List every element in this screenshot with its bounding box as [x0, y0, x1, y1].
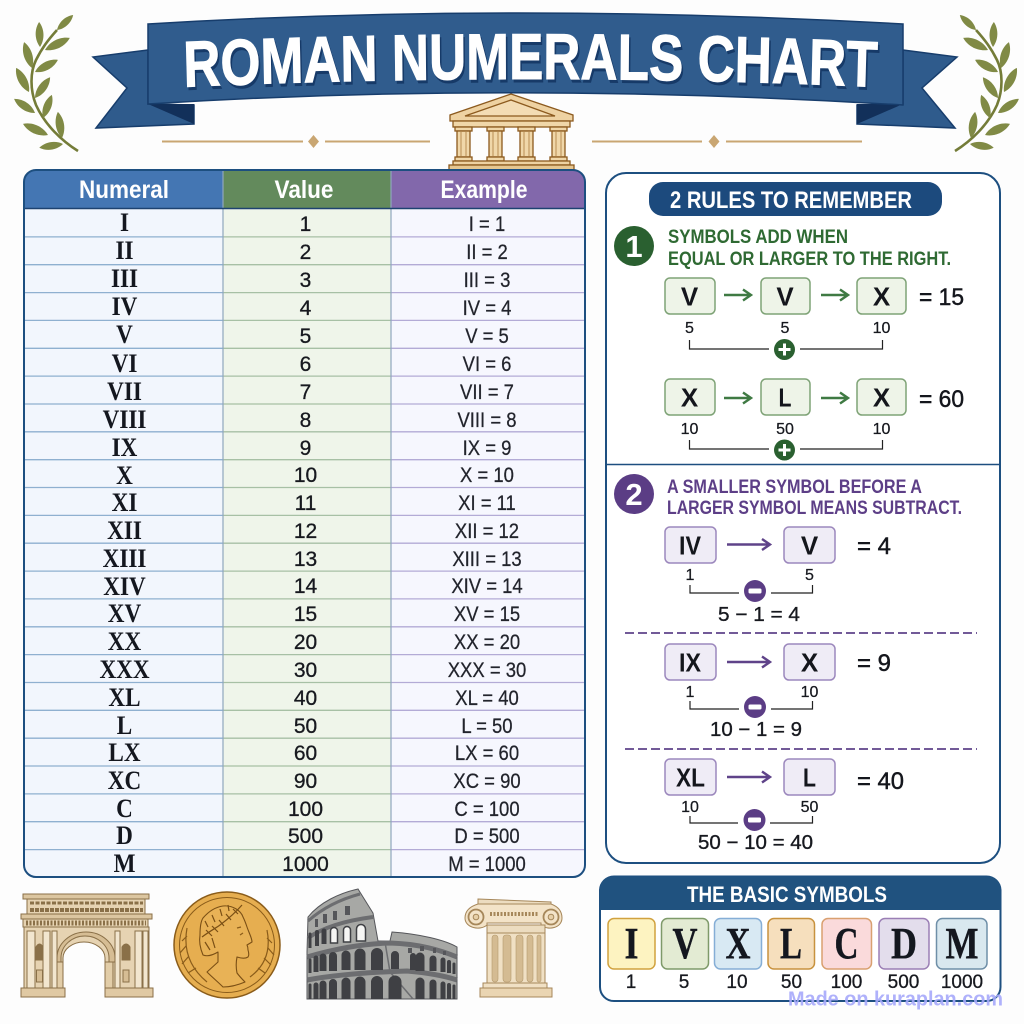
rules heading pill: 2 RULES TO REMEMBER: [670, 187, 912, 214]
table header: Numeral: [79, 176, 169, 204]
rule 2 example: IX: = 9: [857, 650, 891, 677]
rule 1 example: V V X = 15: [665, 278, 964, 360]
value column: 12: [294, 520, 317, 543]
value column: 60: [294, 742, 317, 765]
coin laurel wreath detail: [202, 905, 242, 950]
rule 2 example: IV: V: [801, 530, 819, 560]
rule 2 example: IV: 5 − 1 = 4: [718, 604, 800, 626]
example column: IX = 9: [463, 437, 511, 460]
numeral column: VII: [107, 378, 142, 406]
table header: [24, 170, 585, 208]
value column: 2: [300, 241, 311, 264]
numeral column: L: [117, 712, 132, 740]
example column: VII = 7: [460, 381, 514, 404]
rule 1 heading: [614, 226, 951, 270]
numeral column: XIII: [103, 545, 146, 573]
numeral column: XII: [107, 517, 142, 545]
rule 2 example: IX: 10 − 1 = 9: [710, 719, 802, 741]
numeral column: V: [116, 321, 133, 349]
table grid lines: [24, 170, 585, 877]
numeral column: LX: [108, 739, 141, 767]
rule 1 example: X L X = 60: = 60: [919, 386, 964, 413]
table header: Example: [440, 176, 528, 204]
symbol letters: V: [672, 919, 698, 968]
numeral column: C: [116, 795, 133, 823]
panel: rules: [606, 173, 1000, 863]
rule 2 example: XL: = 40: [857, 768, 904, 795]
example column: VI = 6: [463, 353, 511, 376]
rule 2 example: IV: 5: [805, 567, 814, 584]
rules panel frame: [606, 173, 1000, 863]
numeral column: XXX: [99, 656, 150, 684]
rule 1 example: V V X = 15: V: [681, 282, 699, 312]
table column backgrounds: [24, 208, 585, 877]
numeral column: IV: [112, 293, 138, 321]
numeral column: I: [120, 209, 129, 237]
value column: 13: [294, 548, 317, 571]
rule 2 example: XL: L: [803, 762, 816, 792]
rule 2 example: IX: X: [801, 648, 819, 678]
numeral column: VI: [112, 350, 137, 378]
example column: L = 50: [461, 715, 513, 738]
rule 1 heading: 1: [625, 229, 643, 264]
value column: 1: [300, 213, 311, 236]
numeral column: IX: [112, 434, 138, 462]
rule 2 heading: [614, 474, 962, 519]
example column: D = 500: [454, 825, 520, 848]
banner main ribbon: [148, 13, 903, 105]
example column: XIV = 14: [451, 575, 523, 598]
symbol letters: C: [834, 919, 858, 968]
rule 2 example: IX: [665, 644, 891, 741]
numeral column: XL: [108, 684, 141, 712]
table header: Value: [274, 176, 334, 204]
value column: 15: [294, 603, 317, 626]
value column: 30: [294, 659, 317, 682]
example column: M = 1000: [448, 853, 526, 876]
numeral column: D: [116, 822, 133, 850]
symbol values: 100: [831, 972, 862, 993]
numeral column: XV: [108, 600, 141, 628]
rule 1 example: V V X = 15: = 15: [919, 284, 964, 311]
symbol values: 500: [888, 972, 919, 993]
dashed separator: [625, 748, 977, 750]
rule 2 heading: 2: [625, 477, 643, 512]
rule 2 example: IV: = 4: [857, 533, 891, 560]
rule 1 example: X L X = 60: X: [681, 382, 699, 412]
symbol letters: D: [891, 919, 917, 968]
example column: IV = 4: [463, 297, 511, 320]
value column: 40: [294, 687, 317, 710]
value column: 90: [294, 770, 317, 793]
symbol letters: [624, 919, 978, 968]
rule 2 example: XL: 50 − 10 = 40: [698, 832, 813, 854]
numeral column: XX: [108, 628, 141, 656]
symbol letters: X: [726, 919, 751, 968]
value column: 9: [300, 437, 311, 460]
coin face and side wreaths: [180, 927, 274, 982]
rule 1 example: X L X = 60: X: [873, 382, 891, 412]
value column: 11: [295, 492, 316, 515]
symbol letters: I: [624, 919, 638, 968]
symbol values: 5: [679, 972, 689, 993]
value column: 100: [288, 798, 323, 821]
rule 1 example: X L X = 60: 10: [873, 421, 890, 438]
banner left tail: [93, 50, 194, 128]
watermark: Made on kuraplan.com: [788, 988, 1003, 1010]
rule 1 heading: EQUAL OR LARGER TO THE RIGHT.: [668, 249, 951, 270]
numeral column: III: [111, 265, 138, 293]
rule 1 example: V V X = 15: 5: [685, 320, 694, 337]
icon: ionic column: [465, 899, 562, 997]
rule 2 example: XL: 50: [801, 799, 818, 816]
value column: 14: [294, 575, 317, 598]
rule 2 example: XL: XL: [676, 762, 705, 792]
rule 2 example: XL: 10: [681, 799, 699, 816]
numeral column: VIII: [103, 406, 146, 434]
symbol letters: L: [780, 919, 802, 968]
numeral column: X: [116, 462, 133, 490]
numeral column: M: [114, 850, 135, 878]
banner right tail: [857, 50, 957, 128]
symbol values: 10: [726, 972, 748, 993]
example column: LX = 60: [455, 742, 519, 765]
value column: 5: [300, 325, 311, 348]
title text: ROMAN NUMERALS CHART: [188, 36, 880, 90]
example column: III = 3: [464, 269, 510, 292]
example column: X = 10: [460, 464, 514, 487]
example column: XL = 40: [455, 687, 519, 710]
title banner: [91, 12, 959, 129]
value column: 4: [300, 297, 312, 320]
rule 2 example: IV: IV: [679, 530, 702, 560]
basic symbols heading: THE BASIC SYMBOLS: [687, 882, 887, 907]
rule 2 example: IV: 1: [686, 567, 695, 584]
rule 1 heading: SYMBOLS ADD WHEN: [668, 227, 848, 248]
rule 1 example: V V X = 15: 5: [781, 320, 790, 337]
rule 2 example: IX: 1: [686, 684, 695, 701]
rule 2 example: IX: IX: [679, 648, 702, 678]
value column: 10: [294, 464, 317, 487]
rule 1 example: X L X = 60: L: [778, 382, 792, 412]
value column: 8: [300, 409, 311, 432]
symbol letters: M: [946, 919, 978, 968]
icon: triumphal arch: [21, 894, 153, 997]
example column: V = 5: [465, 325, 509, 348]
example column: [448, 213, 526, 876]
example column: XV = 15: [454, 603, 520, 626]
value column: 50: [294, 715, 317, 738]
example column: XC = 90: [453, 770, 521, 793]
basic symbols frame: [600, 876, 1000, 1001]
rule 2 heading: LARGER SYMBOL MEANS SUBTRACT.: [667, 498, 962, 519]
value column: 20: [294, 631, 317, 654]
example column: XXX = 30: [448, 659, 526, 682]
decorative gold divider left: [162, 135, 430, 148]
example column: VIII = 8: [457, 409, 517, 432]
example column: II = 2: [466, 241, 508, 264]
example column: C = 100: [454, 798, 520, 821]
panel: numerals table: [24, 170, 585, 878]
example column: I = 1: [469, 213, 505, 236]
rule 2 example: IV: [665, 527, 891, 626]
value column: 7: [300, 381, 311, 404]
rule 1 example: X L X = 60: [665, 379, 964, 460]
panel: basic symbols: [600, 876, 1000, 1001]
numeral column: XIV: [103, 573, 146, 601]
icon: right laurel branch: [955, 12, 1021, 151]
rule 1 example: X L X = 60: 50: [776, 421, 794, 438]
example column: XIII = 13: [452, 548, 522, 571]
icon: colosseum: [307, 889, 457, 999]
rules divider: [606, 464, 1000, 466]
icon: greek temple: [449, 94, 574, 170]
example column: XI = 11: [458, 492, 516, 515]
value column: 6: [300, 353, 311, 376]
rule 1 example: V V X = 15: 10: [873, 320, 890, 337]
dashed separator: [625, 632, 977, 634]
banner fold shadows: [148, 104, 903, 124]
symbol values: 1000: [941, 972, 983, 993]
example column: XX = 20: [454, 631, 520, 654]
numeral column: II: [115, 237, 134, 265]
coin portrait: [200, 906, 252, 987]
value column: 1000: [282, 853, 329, 876]
example column: XII = 12: [455, 520, 519, 543]
decorative gold divider right: [592, 135, 862, 148]
value column: 3: [300, 269, 311, 292]
numeral column: XC: [108, 767, 141, 795]
rule 2 example: IX: 10: [801, 684, 818, 701]
rule 1 example: X L X = 60: 10: [681, 421, 698, 438]
symbol values: 1: [626, 972, 636, 993]
rule 2 heading: A SMALLER SYMBOL BEFORE A: [667, 477, 922, 498]
basic symbols heading: [600, 876, 1000, 910]
rule 1 example: V V X = 15: X: [873, 282, 891, 312]
icon: gold coin: [174, 892, 280, 998]
rule 1 example: V V X = 15: V: [776, 282, 794, 312]
symbol values: [626, 972, 983, 993]
numeral column: [99, 209, 150, 878]
title text: ROMAN NUMERALS CHART: [186, 34, 878, 88]
icon: left laurel branch: [12, 12, 78, 151]
rule 2 example: XL: [665, 759, 904, 854]
value column: 500: [288, 825, 323, 848]
numeral column: XI: [112, 489, 137, 517]
table outline: [24, 170, 585, 877]
symbol tiles: [608, 918, 987, 969]
symbol values: 50: [781, 972, 802, 993]
value column: [282, 213, 329, 876]
